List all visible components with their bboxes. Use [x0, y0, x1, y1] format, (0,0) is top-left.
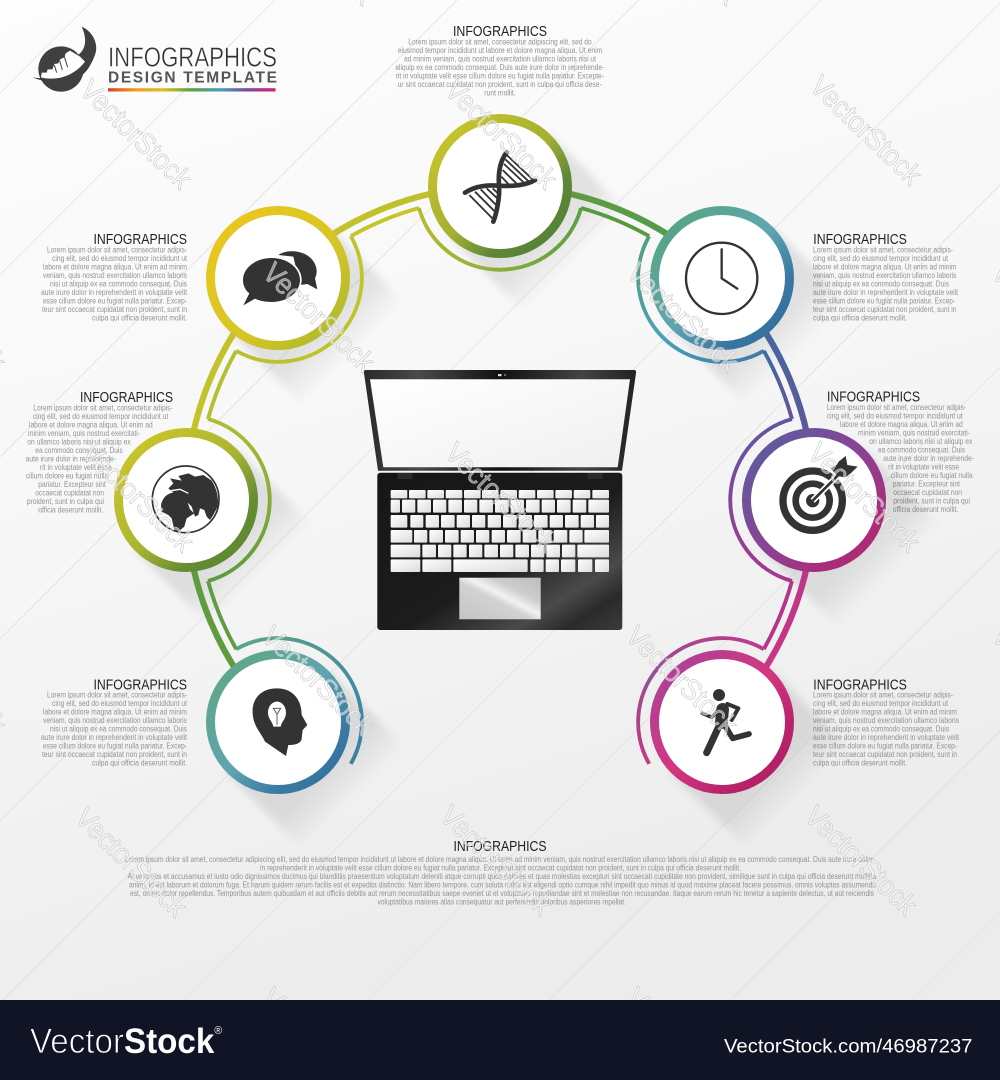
text block: target: Lorem ipsum dolor sit amet, consectetur adipis- [827, 403, 966, 412]
top text block: Lorem ipsum dolor sit amet, consectetur adipiscing elit, sed do [408, 38, 592, 46]
text block: globe: rit in voluptate velit esse [40, 463, 112, 472]
node: globe [118, 432, 254, 568]
text block: target: labore et dolore magna aliqua. Ut enim ad [840, 420, 963, 429]
text block: head: aute irure dolor in reprehenderit in voluptate velit [41, 733, 188, 742]
text block: runner: labore et dolore magna aliqua. Ut enim ad minim [813, 708, 957, 716]
text block: head: Lorem ipsum dolor sit amet, consectetur adipis- [47, 690, 187, 700]
text block: head [41, 678, 188, 768]
text block: speech bubbles: veniam, quis nostrud exercitation ullamco laboris [43, 271, 187, 280]
text block: head: teur sint occaecat cupidatat non proident, sunt in [42, 750, 187, 759]
icon: head with bulb [253, 688, 307, 756]
text block: speech bubbles: Lorem ipsum dolor sit amet, consectetur adipis- [47, 246, 187, 254]
icon: globe [152, 466, 219, 533]
text block: globe: on ullamco laboris nisi ut aliquip ex [27, 438, 131, 446]
node: head [210, 654, 346, 790]
text block: speech bubbles: cing elit, sed do eiusmod tempor incididunt ut [52, 254, 188, 263]
icon: DNA [465, 152, 535, 222]
logo title: INFOGRAPHICS [108, 42, 277, 73]
text block: globe: Lorem ipsum dolor sit amet, consectetur adipis- [33, 404, 173, 412]
watermarks: VectorStock [255, 620, 380, 742]
header logo [32, 27, 277, 92]
node: DNA [432, 118, 568, 254]
text block: globe: cing elit, sed do eiusmod tempor incididunt ut [33, 412, 169, 421]
text block: target: occaecat cupidatat non [893, 488, 962, 497]
bottom text block: Lorem ipsum dolor sit amet, consectetur adipiscing elit, sed do eiusmod tempor incididunt ut labore et dolore magna aliqua. Ut enim ad minim veniam, quis nostrud exercitation ullamco laboris nisi ut aliquip ex ea commodo consequat. Duis aute irure dolor [125, 855, 873, 864]
text block: clock: teur sint occaecat cupidatat non proident, sunt in [813, 305, 956, 314]
text block: target: INFOGRAPHICS [827, 390, 920, 406]
top text block: ad minim veniam, quis nostrud exercitation ullamco laboris nisi ut [404, 54, 597, 64]
text block: clock: veniam, quis nostrud exercitation ullamco laboris [813, 271, 956, 280]
laptop [364, 370, 636, 630]
watermarks: VectorStock [438, 437, 563, 559]
text block: speech bubbles: aute irure dolor in reprehenderit in voluptate velit [41, 288, 188, 297]
text block: target: proident, sunt in culpa qui [893, 496, 970, 506]
top text block: rit in voluptate velit esse cillum dolore eu fugiat nulla pariatur. Excepte- [396, 72, 604, 80]
text block: runner: Lorem ipsum dolor sit amet, consectetur adipis- [813, 690, 953, 700]
text block: clock: labore et dolore magna aliqua. Ut enim ad minim [813, 262, 957, 272]
keyboard [391, 490, 609, 572]
icon: runner [702, 689, 749, 753]
text block: runner: aute irure dolor in reprehenderit in voluptate velit [813, 733, 960, 742]
long shadows [135, 135, 941, 849]
thin outer line [208, 208, 792, 764]
text block: globe: pariatur. Excepteur sint [38, 480, 106, 489]
text block: target: cing elit, sed do eiusmod tempor incididunt ut [827, 412, 963, 420]
watermarks: VectorStock [438, 74, 563, 196]
bottom text block: voluptatibus maiores alias consequatur aut perferendis doloribus asperiores repellat. [378, 898, 626, 906]
touchpad [459, 578, 541, 619]
text block: target: aute irure dolor in reprehende- [883, 454, 974, 463]
text block: globe: aute irure dolor in reprehende- [26, 454, 116, 464]
text block: speech bubbles: INFOGRAPHICS [94, 232, 187, 248]
text block: head: labore et dolore magna aliqua. Ut enim ad minim [43, 708, 187, 716]
icon: speech bubbles [242, 251, 317, 305]
text block: runner: culpa qui officia deserunt mollit. [813, 758, 907, 768]
bottom text block: in reprehenderit in voluptate velit esse cillum dolore eu fugiat nulla pariatur. Excepteur sint occaecat cupidatat non proident, sunt in culpa qui officia deserunt mollit. [260, 864, 741, 872]
rainbow bar [108, 88, 276, 92]
footer logo: ® [214, 1025, 222, 1037]
text block: speech bubbles: culpa qui officia deserunt mollit. [92, 314, 187, 322]
watermarks: VectorStock [433, 800, 558, 922]
text block: runner: veniam, quis nostrud exercitation ullamco laboris [813, 716, 959, 725]
top text block: INFOGRAPHICS [453, 24, 547, 40]
footer link: VectorStock.com/46987237 [724, 1036, 972, 1058]
node: runner [654, 654, 790, 790]
webcam [498, 374, 506, 376]
text block: target: ea commodo consequat. Duis [878, 446, 965, 454]
watermarks: VectorStock [798, 800, 923, 922]
watermarks: VectorStock [620, 257, 745, 379]
bottom text block: At vero eos et accusamus et iusto odio dignissimos ducimus qui blanditiis praesentium voluptatum deleniti atque corrupti quos dolores et quas molestias excepturi sint occaecati cupiditate non provident, similique sunt in culpa qui officia deserunt mollitia [128, 872, 876, 881]
top text block: runt mollit. [484, 88, 516, 98]
text block: runner: cing elit, sed do eiusmod tempor incididunt ut [813, 699, 949, 708]
text block: head: esse cillum dolore eu fugiat nulla pariatur. Excep- [43, 742, 187, 750]
text block: clock: esse cillum dolore eu fugiat nulla pariatur. Excep- [813, 296, 955, 306]
hinges [398, 473, 602, 479]
text block: speech bubbles [41, 232, 188, 322]
icon: target [783, 456, 858, 530]
laptop lid [364, 370, 636, 471]
text block: globe: ea commodo consequat. Duis [35, 446, 123, 455]
connector arcs [186, 186, 814, 722]
text block: runner: INFOGRAPHICS [813, 678, 907, 694]
watermarks: VectorStock [801, 437, 926, 559]
text block: clock: cing elit, sed do eiusmod tempor incididunt ut [813, 254, 949, 263]
text block: clock: INFOGRAPHICS [813, 232, 907, 248]
text block: head: INFOGRAPHICS [94, 678, 187, 694]
top text block: eiusmod tempor incididunt ut labore et dolore magna aliqua. Ut enim [398, 46, 603, 55]
text block: target: cillum dolore eu fugiat nulla [891, 471, 973, 480]
watermarks: VectorStock [68, 802, 193, 924]
node: speech bubbles [210, 210, 346, 346]
text block: clock: Lorem ipsum dolor sit amet, consectetur adipis- [813, 246, 953, 254]
laptop screen [370, 379, 630, 467]
text block: head: veniam, quis nostrud exercitation ullamco laboris [43, 716, 187, 725]
text block: globe [26, 390, 173, 514]
text block: globe: officia deserunt mollit. [38, 506, 103, 514]
text block: speech bubbles: teur sint occaecat cupidatat non proident, sunt in [42, 305, 187, 314]
text block: globe: minim veniam, quis nostrud exercitati- [28, 429, 140, 438]
bottom text block [125, 839, 876, 906]
top text block: aliquip ex ea commodo consequat. Duis aute irure dolor in reprehende- [395, 63, 605, 72]
logo emblem [32, 27, 96, 92]
node: clock [654, 210, 790, 346]
icon: clock [686, 243, 757, 314]
text block: globe: labore et dolore magna aliqua. Ut enim ad [29, 420, 153, 430]
node: target [746, 432, 882, 568]
text block: speech bubbles: labore et dolore magna aliqua. Ut enim ad minim [43, 262, 187, 272]
text block: speech bubbles: esse cillum dolore eu fugiat nulla pariatur. Excep- [43, 296, 187, 306]
watermarks: VectorStock [803, 70, 928, 192]
watermarks: VectorStock [75, 437, 200, 559]
footer bar [0, 1000, 1000, 1080]
text block: target: officia deserunt mollit. [893, 505, 958, 514]
text block: head: culpa qui officia deserunt mollit. [92, 758, 187, 768]
text block: globe: INFOGRAPHICS [80, 390, 173, 406]
bottom text block: est, omnis dolor repellendus. Temporibus autem quibusdam et aut officiis debitis aut rerum necessitatibus saepe eveniet ut et voluptates repudiandae sint et molestiae non recusandae. Itaque earum rerum hic tenetur a sapiente delectus, ut aut reiciendis [130, 889, 874, 898]
text block: globe: occaecat cupidatat non [35, 488, 104, 498]
text block: head: nisi ut aliquip ex ea commodo consequat. Duis [50, 724, 187, 734]
top text block: ur sint occaecat cupidatat non proident, sunt in culpa qui officia dese- [398, 80, 602, 89]
text block: clock [813, 232, 959, 322]
text block: runner [813, 678, 960, 768]
text block: target: on ullamco laboris nisi ut aliquip ex [869, 437, 972, 446]
bottom text block: animi, id est laborum et dolorum fuga. Et harum quidem rerum facilis est et expedita distinctio. Nam libero tempore, cum soluta nobis est eligendi optio cumque nihil impedit quo minus id quod maxime placeat facere possimus, omnis voluptas assumenda [129, 880, 876, 890]
text block: globe: cillum dolore eu fugiat nulla [26, 472, 109, 480]
text block: target: rit in voluptate velit esse [888, 462, 959, 472]
logo subtitle: DESIGN TEMPLATE [108, 69, 277, 86]
footer logo: VectorStock [30, 1022, 219, 1061]
laptop base [377, 473, 622, 630]
watermarks: VectorStock [256, 257, 381, 379]
bottom text block: INFOGRAPHICS [454, 839, 546, 855]
text block: speech bubbles: nisi ut aliquip ex ea commodo consequat. Duis [50, 280, 187, 288]
watermarks: VectorStock [73, 74, 198, 196]
text block: clock: culpa qui officia deserunt mollit. [813, 314, 907, 322]
text block: globe: proident, sunt in culpa qui [27, 497, 104, 506]
text block: target: minim veniam, quis nostrud exercitati- [858, 428, 970, 438]
text block: clock: aute irure dolor in reprehenderit in voluptate velit [813, 288, 959, 297]
watermarks: VectorStock [619, 620, 744, 742]
text block: head: cing elit, sed do eiusmod tempor incididunt ut [52, 699, 188, 708]
text block: clock: nisi ut aliquip ex ea commodo consequat. Duis [813, 280, 949, 288]
text block: runner: teur sint occaecat cupidatat non proident, sunt in [813, 750, 957, 759]
text block: target [827, 390, 974, 514]
text block: runner: nisi ut aliquip ex ea commodo consequat. Duis [813, 724, 949, 734]
text block: runner: esse cillum dolore eu fugiat nulla pariatur. Excep- [813, 742, 957, 750]
text block: target: pariatur. Excepteur sint [893, 480, 961, 488]
top text block [395, 24, 605, 98]
